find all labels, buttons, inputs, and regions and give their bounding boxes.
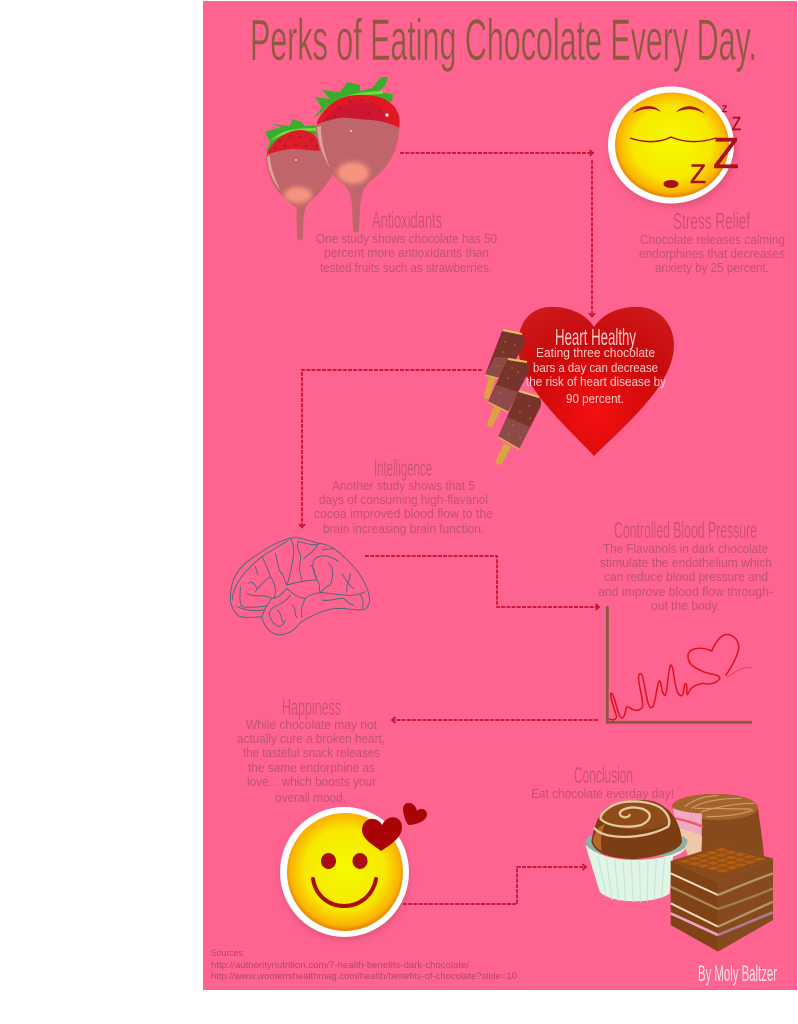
heart: small [403, 803, 427, 825]
body: conclusion: Eat chocolate everday day! [531, 787, 674, 801]
arrow: antioxidants to heart [400, 150, 595, 316]
icon: chocolate ice cream bars [484, 330, 541, 465]
snore letters: Z [722, 104, 727, 114]
block: stress relief [639, 208, 785, 275]
pink background panel [203, 1, 797, 990]
cupcake chocolate [591, 800, 682, 859]
cupcake wrapper [585, 835, 687, 902]
body: controlled blood pressure: The Flavanols in dark chocolate [603, 542, 768, 556]
body: antioxidants: One study shows chocolate has 50 [316, 232, 497, 246]
body: heart healthy: the risk of heart disease by [526, 375, 667, 389]
body: happiness: the tasteful snack releases [243, 746, 380, 760]
layered chocolate cube [671, 845, 773, 952]
body: intelligence [314, 479, 493, 536]
block: controlled blood pressure [598, 517, 773, 613]
body: happiness: overall mood. [275, 791, 346, 805]
sources: Sources: [211, 948, 245, 959]
body: antioxidants [316, 232, 497, 275]
arrow: blood pressure to happiness [392, 717, 598, 723]
snore letters: Z [732, 114, 741, 134]
body: intelligence: Another study shows that 5 [332, 479, 475, 493]
body: controlled blood pressure [598, 542, 773, 613]
block: intelligence: Intelligence [374, 455, 432, 481]
icon: brain [230, 538, 370, 635]
block: happiness [237, 694, 385, 805]
body: stress relief: endorphines that decreases [639, 247, 785, 261]
arrow: happiness to conclusion [403, 864, 586, 904]
body: heart healthy: bars a day can decrease [533, 361, 658, 375]
block: heart healthy [526, 324, 667, 406]
heart: large [362, 817, 402, 851]
icon: happy face with hearts [280, 803, 427, 940]
body: heart healthy: 90 percent. [566, 392, 624, 406]
body: controlled blood pressure: and improve blood flow through- [598, 585, 773, 599]
body: antioxidants: tested fruits such as strawberries. [320, 261, 492, 275]
body: heart healthy: Eating three chocolate [536, 346, 655, 360]
arrow: brain to blood pressure [365, 556, 599, 610]
body: happiness [237, 718, 385, 805]
snore letters: Z [690, 159, 706, 189]
arrow: heart to brain [299, 370, 482, 528]
body: intelligence: cocoa improved blood flow to the [314, 507, 493, 521]
body: happiness: actually cure a broken heart, [237, 732, 385, 746]
body: controlled blood pressure: stimulate the endothelium which [600, 556, 772, 570]
snore letters [690, 104, 741, 189]
heading: conclusion: Conclusion [574, 762, 633, 788]
back chocolate [672, 794, 764, 857]
snore letters: Z [713, 129, 739, 178]
body: controlled blood pressure: out the body. [651, 599, 720, 613]
icon: assorted chocolates [585, 794, 773, 952]
chart: blood pressure axes and heartbeat line [607, 606, 752, 722]
block: conclusion [531, 762, 674, 801]
sources: http://authoritynutrition.com/7-health-benefits-dark-chocolate/ [211, 960, 469, 971]
body: happiness: the same endorphine as [248, 761, 375, 775]
body: antioxidants: percent more antioxidants than [324, 246, 489, 260]
body: intelligence: brain increasing brain function. [323, 522, 484, 536]
sources: http://www.womenshealthmag.com/health/benefits-of-chocolate?slide=10 [211, 971, 517, 982]
block: intelligence [314, 455, 493, 536]
icon: red heart [518, 307, 674, 456]
heading: antioxidants: Antioxidants [372, 207, 442, 233]
icon: chocolate dipped strawberries [265, 77, 400, 240]
body: happiness: love... which boosts your [247, 775, 376, 789]
heading: heart healthy: Heart Healthy [555, 324, 636, 350]
sources [211, 948, 517, 982]
block: antioxidants [316, 207, 497, 275]
body: heart healthy [526, 346, 667, 406]
body: stress relief [639, 233, 785, 275]
body: stress relief: Chocolate releases calming [640, 233, 785, 247]
icon: sleeping face [608, 86, 741, 207]
body: stress relief: anxiety by 25 percent. [655, 261, 769, 275]
body: intelligence: days of consuming high-flavanol [319, 493, 488, 507]
heading: happiness: Happiness [282, 694, 341, 720]
body: controlled blood pressure: can reduce blood pressure and [604, 570, 768, 584]
body: happiness: While chocolate may not [246, 718, 377, 732]
